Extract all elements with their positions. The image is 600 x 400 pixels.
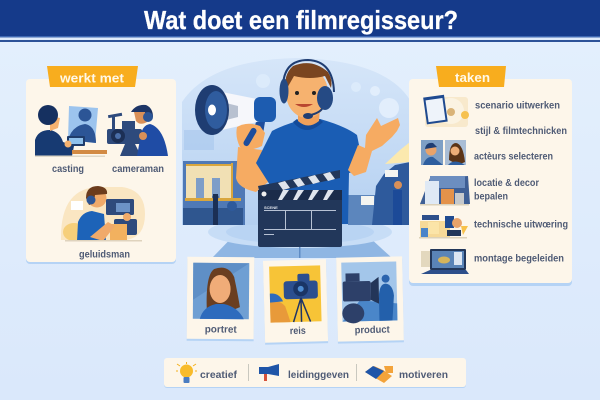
panel: taken	[409, 66, 572, 286]
icon: casting	[35, 105, 107, 157]
text: geluidsman: geluidsman	[79, 250, 130, 260]
hand holding megaphone	[236, 124, 265, 149]
icon: locatie	[420, 176, 470, 206]
text: reis: reis	[290, 326, 306, 337]
text: technische uitwoering: technische uitwœring	[474, 220, 568, 230]
icon: montage	[421, 249, 469, 274]
text: montage begeleiden: montage begeleiden	[474, 254, 564, 264]
traits bar	[164, 358, 466, 388]
headset	[280, 60, 334, 119]
icon: clapperboard	[258, 170, 342, 247]
text: leidinggeven: leidinggeven	[288, 370, 349, 381]
text: actèurs selecteren: actèurs selecteren	[474, 152, 553, 162]
heading tag: werkt met: werkt met	[59, 72, 125, 86]
icon: megaphone small	[259, 364, 279, 381]
text: portret: portret	[205, 324, 237, 336]
icon: scenario	[423, 95, 469, 127]
text: casting: casting	[52, 164, 84, 175]
photo card: reis	[263, 259, 328, 345]
text: stijl & filmtechnicken: stijl & filmtechnicken	[475, 126, 567, 137]
head	[286, 68, 328, 118]
icon: technische uitvoering	[419, 215, 468, 238]
icon: light bulb	[176, 362, 197, 383]
text: locatie & decor bepalen: bepalen	[474, 192, 508, 202]
panel: werkt met	[26, 66, 176, 264]
text: creatief: creatief	[200, 370, 238, 381]
heading tag: werkt met	[47, 66, 138, 87]
icon: geluidsman	[61, 186, 145, 242]
central illustration	[182, 58, 410, 258]
heading tag: taken: taken	[455, 71, 490, 85]
title banner	[0, 0, 600, 42]
icon: handshake	[365, 366, 393, 383]
text: cameraman: cameraman	[112, 164, 164, 175]
text: scenario uitwerken: scenario uitwerken	[475, 100, 560, 112]
hair	[285, 63, 332, 90]
text: motiveren: motiveren	[399, 370, 448, 381]
platform	[208, 216, 392, 258]
title: Wat doet een filmregisseur?	[144, 5, 458, 35]
icon: acteurs	[421, 140, 466, 165]
shirt	[256, 119, 364, 224]
image: portret	[193, 263, 249, 319]
icon: clapperboard: SCENE	[264, 205, 278, 210]
image: product	[341, 261, 397, 324]
figure: director	[236, 60, 400, 224]
text: locatie & decor bepalen: locatie & decor	[474, 178, 539, 189]
neck	[298, 108, 320, 126]
left arm	[236, 147, 274, 192]
photo card: product	[336, 256, 404, 344]
heading tag: taken	[436, 66, 506, 87]
icon: cameraman	[107, 105, 168, 156]
text: product: product	[355, 325, 390, 336]
film set backdrop	[182, 58, 410, 225]
photo card: portret	[187, 257, 254, 341]
icon: megaphone	[195, 85, 276, 147]
right arm and hand	[348, 118, 400, 176]
image: reis	[269, 265, 322, 323]
text: locatie & decor bepalen	[474, 178, 539, 202]
